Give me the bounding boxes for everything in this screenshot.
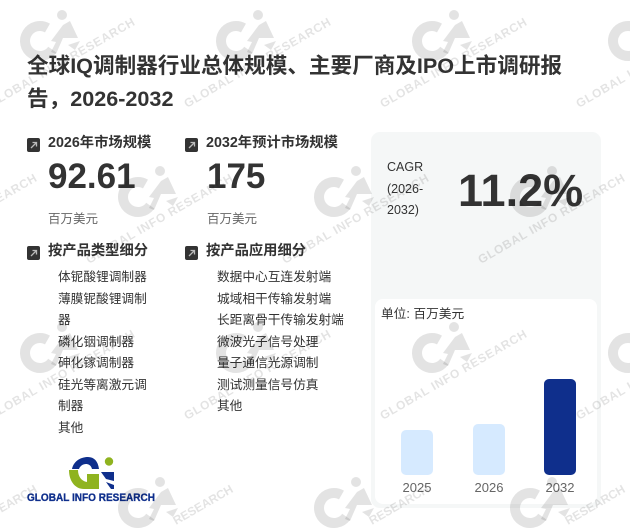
list: product types: 制器 xyxy=(58,399,83,413)
bar: 2025 xyxy=(401,430,433,475)
panel: segmentation by product type xyxy=(27,242,148,434)
list: product types: 薄膜铌酸锂调制 xyxy=(58,292,147,306)
watermark pattern: GLOBAL INFO RESEARCH xyxy=(476,171,627,267)
label: CAGR period xyxy=(387,160,423,217)
watermark pattern: GLOBAL INFO RESEARCH xyxy=(182,15,333,111)
list: product types xyxy=(58,270,147,434)
list: product types: 其他 xyxy=(58,420,83,434)
list: applications: 测试测量信号仿真 xyxy=(217,378,318,392)
list: product types: 体铌酸锂调制器 xyxy=(58,270,147,284)
heading: by product type: 按产品类型细分 xyxy=(48,243,148,259)
list: applications: 城域相干传输发射端 xyxy=(217,292,331,306)
watermark pattern: GLOBAL INFO RESEARCH xyxy=(378,327,529,423)
list: applications: 其他 xyxy=(217,399,242,413)
label: CAGR period: CAGR xyxy=(387,160,423,174)
panel: bar chart xyxy=(375,299,597,504)
watermark pattern: GLOBAL INFO RESEARCH xyxy=(84,171,235,267)
list: product types: 磷化铟调制器 xyxy=(58,334,134,348)
list: applications: 长距离骨干传输发射端 xyxy=(217,313,344,327)
number: 92.61: 92.61 xyxy=(48,157,136,196)
watermark pattern: RESEARCH xyxy=(366,482,432,528)
list: applications xyxy=(217,270,344,413)
heading: 2032 forecast market size: 2032年预计市场规模 xyxy=(206,135,338,151)
list: product types: 砷化镓调制器 xyxy=(58,356,134,370)
watermark pattern: GLOBAL INFO RESEARCH xyxy=(182,327,333,423)
heading: 2026 market size: 2026年市场规模 xyxy=(48,135,151,151)
list: applications: 量子通信光源调制 xyxy=(217,356,318,370)
list: product types: 硅光等离激元调 xyxy=(58,378,147,392)
title: 全球IQ调制器行业总体规模、主要厂商及IPO上市调研报 xyxy=(27,53,562,78)
watermark pattern: RESEARCH xyxy=(562,482,628,528)
logo: Global Info Research xyxy=(27,457,155,504)
icon: arrow xyxy=(185,246,198,260)
unit: 百万美元 xyxy=(207,212,257,226)
watermark pattern: GLOBAL INFO RESEARCH xyxy=(280,171,431,267)
axis label 2025: 2025 xyxy=(403,480,431,495)
panel: 2026 market size xyxy=(27,134,151,226)
bar: 2032 xyxy=(544,379,576,475)
icon: arrow xyxy=(27,138,40,152)
number: CAGR value: 11.2% xyxy=(458,165,583,216)
watermark pattern: RESEARCH xyxy=(170,482,236,528)
icon: arrow xyxy=(27,246,40,260)
axis label 2032: 2032 xyxy=(546,480,574,495)
axis label 2026: 2026 xyxy=(475,480,503,495)
panel: segmentation by application xyxy=(185,242,344,413)
label: CAGR period: 2032) xyxy=(387,203,419,217)
panel: 2032 market size xyxy=(185,134,338,226)
list: applications: 数据中心互连发射端 xyxy=(217,270,331,284)
list: applications: 微波光子信号处理 xyxy=(217,334,318,348)
number: 175: 175 xyxy=(207,157,265,196)
label: CAGR period: (2026- xyxy=(387,182,423,196)
panel: CAGR and chart card xyxy=(371,132,601,508)
title: 告，2026-2032 xyxy=(27,86,173,111)
unit: 百万美元 xyxy=(48,212,98,226)
heading: by application: 按产品应用细分 xyxy=(206,243,306,259)
watermark pattern: GLOBAL INFO RESEARCH xyxy=(378,15,529,111)
chart unit label: 单位: 百万美元 xyxy=(381,307,464,321)
title xyxy=(27,53,562,111)
bar: 2026 xyxy=(473,424,505,475)
list: product types: 器 xyxy=(58,313,71,327)
icon: arrow xyxy=(185,138,198,152)
